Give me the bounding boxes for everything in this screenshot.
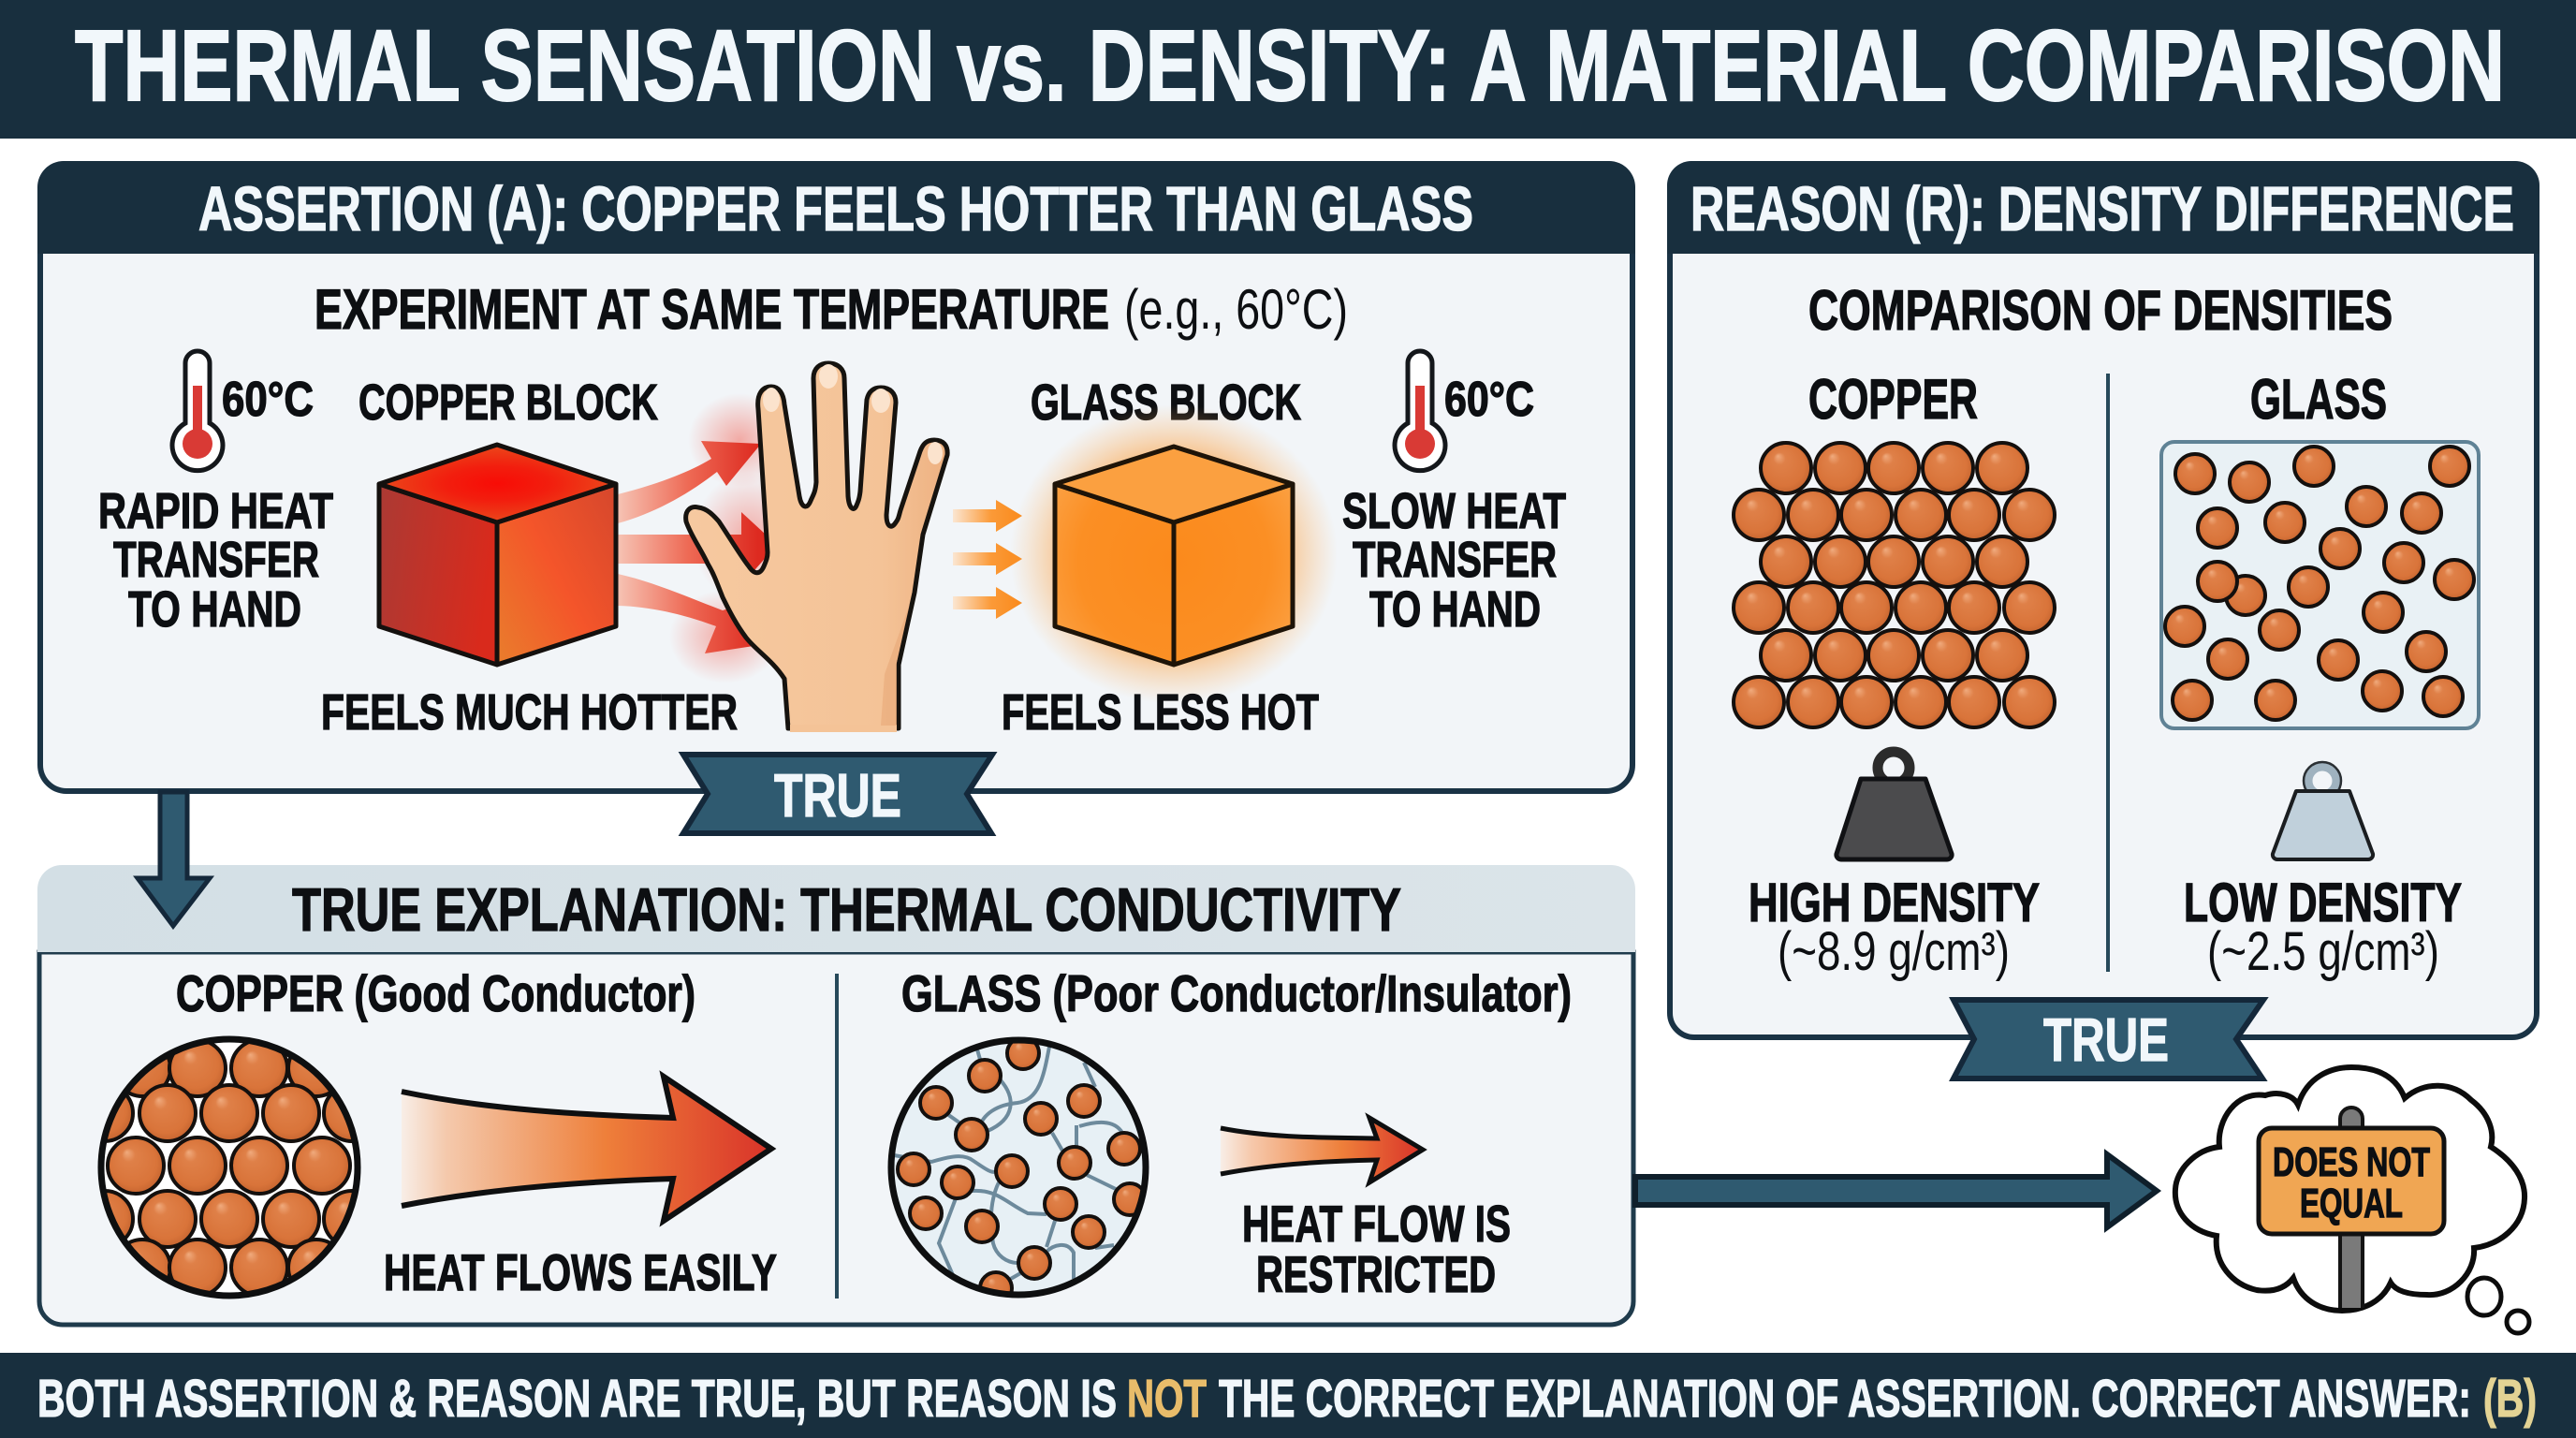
conclusion text: BOTH ASSERTION & REASON ARE TRUE, BUT REASON IS [37,1369,1117,1429]
feels much hotter label: FEELS MUCH HOTTER [321,684,738,741]
low density label: (~2.5 g/cm³) [2207,921,2439,982]
copper atomic lattice [97,1035,361,1299]
slow heat transfer text [1342,483,1566,638]
heat flows easily label: HEAT FLOWS EASILY [384,1243,777,1301]
panel: assertion [37,161,1635,833]
heat arrows: glass to hand [953,500,1022,619]
copper block label: COPPER BLOCK [359,374,658,431]
copper label: COPPER [1808,368,1978,431]
conclusion text: NOT [1127,1369,1207,1429]
true banner: reason [1954,1000,2263,1078]
icon: heavy weight [1837,752,1952,859]
copper dense atoms [1734,443,2055,727]
slow heat transfer text: TRANSFER [1353,532,1557,588]
assertion heading: ASSERTION (A): COPPER FEELS HOTTER THAN GLASS [198,174,1473,244]
glass sparse atoms [2161,442,2479,728]
rapid heat transfer text [98,483,333,638]
heat flow restricted label [1242,1195,1511,1303]
true banner: reason: TRUE [2043,1005,2169,1074]
rapid heat transfer text: RAPID HEAT [98,483,333,539]
glass conductor label: GLASS (Poor Conductor/Insulator) [901,964,1572,1022]
conclusion bar [0,1353,2576,1438]
red glow near hand [669,393,805,683]
glass block label: GLASS BLOCK [1031,374,1301,431]
left temperature: 60°C [222,373,314,427]
icon: copper block [379,445,616,665]
high density label [1749,873,2040,982]
sign board: EQUAL [2300,1181,2403,1226]
panel: reason [1667,161,2539,1078]
glass atomic network [891,1037,1146,1304]
high density label: HIGH DENSITY [1749,873,2040,933]
experiment subtitle: EXPERIMENT AT SAME TEMPERATURE [315,278,1109,341]
icon: hand [686,363,947,732]
arrow: heat flows easily [402,1077,771,1221]
sign board [2259,1128,2444,1234]
sign post [2340,1108,2363,1308]
rapid heat transfer text: TRANSFER [113,532,319,588]
rapid heat transfer text: TO HAND [128,581,301,638]
density comparison subtitle: COMPARISON OF DENSITIES [1808,279,2393,342]
explanation heading: TRUE EXPLANATION: THERMAL CONDUCTIVITY [292,875,1401,944]
slow heat transfer text: TO HAND [1369,581,1541,638]
conclusion text [37,1369,2537,1429]
arrow: to does not equal [1635,1154,2157,1227]
feels less hot label: FEELS LESS HOT [1002,684,1319,741]
true banner: assertion: TRUE [774,761,901,829]
panel: true explanation [37,865,1635,1325]
icon: thermometer right [1395,351,1445,471]
thought bubbles [2467,1278,2529,1333]
low density label [2184,873,2462,982]
heat flow restricted label: RESTRICTED [1256,1245,1496,1303]
copper conductor label: COPPER (Good Conductor) [176,964,695,1022]
arrow: restricted heat flow [1221,1118,1423,1182]
conclusion text: (B) [2483,1369,2537,1429]
heat arrows: copper to hand [618,441,777,653]
icon: light weight [2273,762,2373,859]
experiment subtitle: (e.g., 60°C) [1124,278,1348,341]
icon: thermometer left [172,351,223,471]
slow heat transfer text: SLOW HEAT [1342,483,1566,539]
true banner: assertion [683,755,992,833]
arrow: assertion down to true explanation [138,792,210,926]
icon: glass block [1010,404,1338,704]
title bar [0,0,2576,139]
sign board: DOES NOT [2273,1139,2430,1185]
heat flow restricted label: HEAT FLOW IS [1242,1195,1511,1253]
thought cloud with sign [2175,1067,2529,1333]
high density label: (~8.9 g/cm³) [1778,921,2010,982]
right temperature: 60°C [1444,373,1534,427]
glass label: GLASS [2250,368,2387,431]
low density label: LOW DENSITY [2184,873,2462,933]
